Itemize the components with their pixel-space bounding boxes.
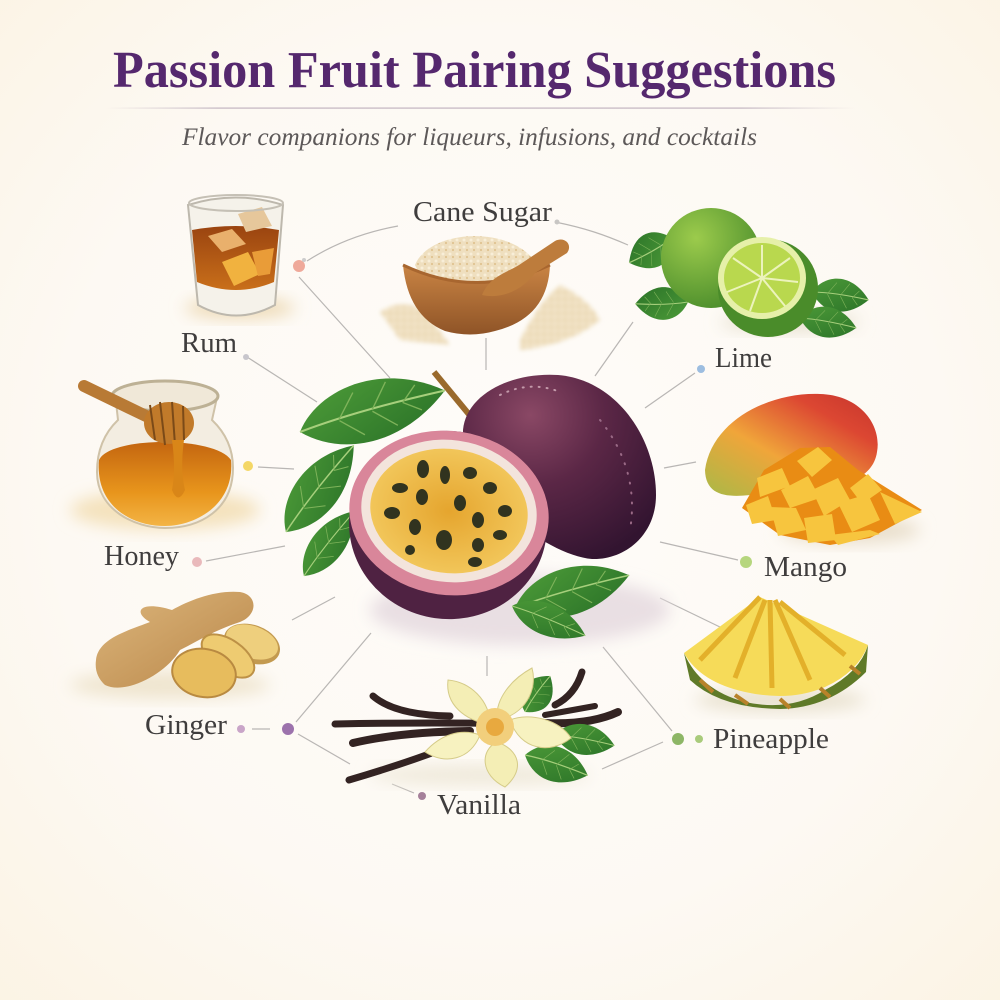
cut fruit xyxy=(337,418,559,632)
labels: Vanilla xyxy=(437,790,522,821)
icon: honey jar xyxy=(70,381,260,530)
labels xyxy=(104,197,847,821)
icon: lime xyxy=(621,208,871,342)
icon: cane sugar bowl xyxy=(380,236,600,350)
icon: vanilla xyxy=(335,667,618,791)
whole fruit xyxy=(463,375,656,559)
label dots xyxy=(192,220,752,800)
labels: Pineapple xyxy=(713,724,829,755)
connector lines xyxy=(206,222,738,793)
central passion fruit xyxy=(268,361,670,650)
stem xyxy=(434,372,472,418)
subtitle: Flavor companions for liqueurs, infusions, and cocktails xyxy=(181,124,757,151)
icon: pineapple xyxy=(684,597,868,712)
title: Passion Fruit Pairing Suggestions xyxy=(113,42,836,99)
labels: Lime xyxy=(715,343,772,374)
labels: Ginger xyxy=(145,710,228,741)
labels: Mango xyxy=(764,552,847,583)
icon: ginger xyxy=(70,592,286,702)
icon: mango xyxy=(705,394,922,545)
leaves xyxy=(291,361,453,460)
labels: Cane Sugar xyxy=(413,197,553,228)
labels: Honey xyxy=(104,541,179,572)
icon: rum glass xyxy=(185,195,295,319)
seeds xyxy=(384,460,512,567)
labels: Rum xyxy=(181,328,237,359)
